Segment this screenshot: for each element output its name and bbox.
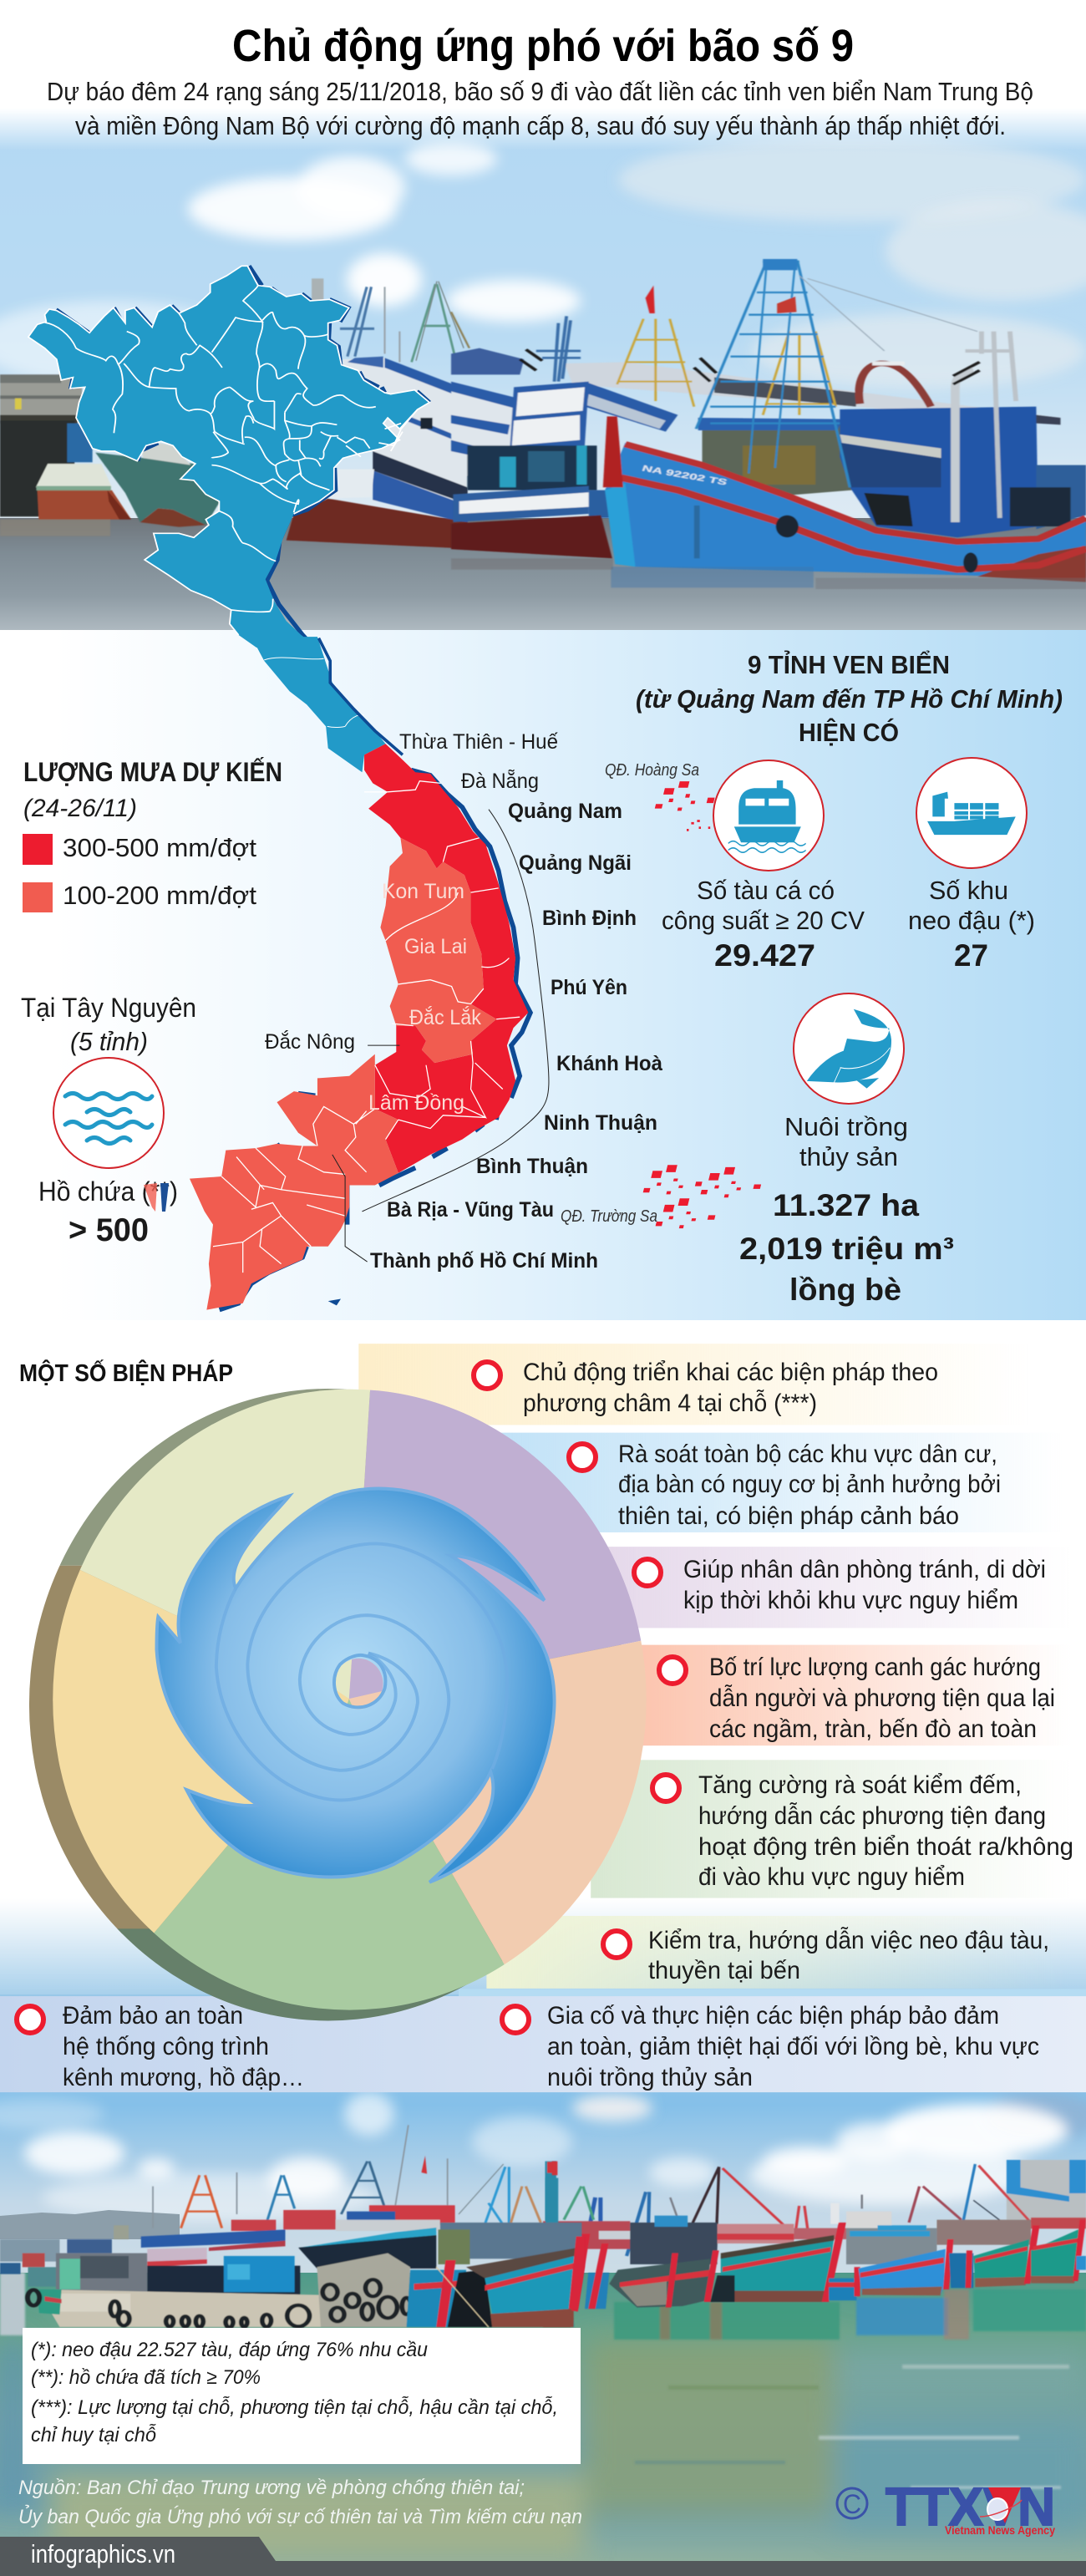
map labels: Phú Yên: [551, 976, 627, 999]
rainfall legend: 300-500 mm/đợt: [63, 833, 256, 862]
big hull: [605, 443, 1086, 579]
harbour right: big blue fishing boat: [451, 259, 1086, 589]
panel: 9 coastal provinces: [636, 650, 1063, 1307]
map of Vietnam: [28, 266, 662, 1310]
panel: measures: [0, 1344, 1086, 2092]
photo: fishing boats at harbour: [0, 100, 1086, 631]
teal hull: [466, 2248, 578, 2279]
red superstructure: [283, 2210, 336, 2229]
map labels: Bình Định: [542, 907, 637, 930]
boat A: [451, 382, 516, 476]
fleet: right half: [543, 2160, 1086, 2327]
measure 7: Đảm bảo an toàn: [63, 2002, 243, 2030]
map labels: Quảng Ngãi: [519, 851, 632, 875]
logo: TTXVN: Vietnam News Agency: [945, 2523, 1055, 2537]
icon: fishing boat: [713, 760, 824, 871]
disc: [28, 1389, 647, 2020]
reservoir stat: Tây Nguyên: > 500: [69, 1212, 149, 1248]
reservoir stat: Tây Nguyên: (5 tỉnh): [70, 1027, 148, 1056]
measure 1: phương châm 4 tại chỗ (***): [523, 1390, 817, 1417]
heading: MỘT SỐ BIỆN PHÁP: [19, 1359, 233, 1387]
intro text: [47, 77, 1033, 140]
barge: [56, 2253, 147, 2295]
stat: fishing boats: Số tàu cá có: [697, 876, 835, 905]
measure 6: thuyền tại bến: [648, 1957, 800, 1984]
measure 7: kênh mương, hồ đập…: [63, 2064, 304, 2091]
water colour variation: [0, 2340, 1086, 2557]
measure 2: địa bàn có nguy cơ bị ảnh hưởng bởi: [618, 1471, 1001, 1498]
islands: Hoàng Sa and Trường Sa: QĐ. Trường Sa: [561, 1207, 657, 1226]
blue tower: [696, 261, 850, 487]
measure 7: [17, 2002, 304, 2091]
source text: Nguồn: Ban Chỉ đạo Trung ương về phòng chống thiên tai;: [18, 2477, 525, 2499]
footnotes box: chỉ huy tại chỗ: [31, 2423, 156, 2446]
reservoir stat: Tây Nguyên: Hồ chứa (**): [38, 1176, 178, 1207]
rainfall legend: [23, 757, 282, 912]
yellow towers: [617, 319, 835, 415]
heading: HIỆN CÓ: [799, 717, 899, 747]
measure 4: dẫn người và phương tiện qua lại: [709, 1684, 1055, 1712]
chart: measure disc with hurricane: [28, 1389, 647, 2020]
map labels: Đà Nẵng: [461, 769, 539, 793]
superstructure: [840, 407, 1038, 537]
map labels: Gia Lai: [404, 935, 467, 958]
building: [1007, 2160, 1086, 2223]
map labels: Lâm Đồng: [368, 1091, 464, 1115]
photo: harbour with fishing fleet: [0, 1898, 1086, 2561]
map: central and southern provinces: [190, 637, 549, 1310]
map labels: Bà Rịa - Vũng Tàu: [387, 1198, 554, 1222]
measure 5: đi vào khu vực nguy hiểm: [698, 1863, 965, 1891]
stat: aquaculture: 2,019 triệu m³: [739, 1232, 954, 1266]
map labels: Bình Thuận: [476, 1155, 588, 1178]
fleet: left half: [0, 2125, 585, 2327]
salmon highlands 100-200 mm: [380, 838, 496, 1063]
hull 2: [721, 2238, 834, 2302]
rainfall legend: LƯỢNG MƯA DỰ KIẾN: [23, 757, 282, 787]
stat: anchorage areas: [908, 876, 1035, 973]
footnotes box: (*): neo đậu 22.527 tàu, đáp ứng 76% nhu cầu: [31, 2339, 428, 2361]
footer bar with site name: infographics.vn: [31, 2539, 175, 2568]
icon: fish: [794, 993, 904, 1104]
map labels: Đắc Nông: [265, 1029, 355, 1054]
icon: water waves: [53, 1058, 164, 1168]
pipes and masts: [955, 370, 973, 522]
rainfall legend: 100-200 mm/đợt: [63, 881, 256, 910]
measure 8: an toàn, giảm thiệt hại đối với lồng bè, khu vực: [547, 2033, 1039, 2060]
measure 8: [502, 2002, 1039, 2091]
map labels: Thừa Thiên - Huế: [399, 730, 558, 754]
measure 6: [603, 1927, 1049, 1984]
map: northern provinces: [28, 266, 429, 648]
measure 4: [659, 1654, 1055, 1743]
blue hull: [407, 2270, 466, 2327]
harbour right: big blue fishing boat: NA 92202 TS: [641, 464, 728, 487]
reflection: [611, 567, 814, 587]
footer bar with site name: [0, 2537, 1086, 2576]
footnotes box: (**): hồ chứa đã tích ≥ 70%: [31, 2366, 261, 2389]
islands: Hoàng Sa and Trường Sa: QĐ. Hoàng Sa: [605, 761, 699, 780]
hull 4: [973, 2239, 1029, 2287]
measure 5: hoạt động trên biển thoát ra/không: [698, 1833, 1073, 1861]
logo: TTXVN: C: [843, 2489, 861, 2519]
measure 6: Kiểm tra, hướng dẫn việc neo đậu tàu,: [648, 1927, 1049, 1954]
hull 0: [543, 2248, 578, 2327]
measure 1: Chủ động triển khai các biện pháp theo: [523, 1359, 938, 1386]
stat: fishing boats: 29.427: [714, 938, 815, 973]
hull 3: [859, 2249, 946, 2295]
harbour centre: blue-white boats left part: [287, 278, 468, 549]
map labels: Quảng Nam: [508, 800, 622, 823]
measure 8: nuôi trồng thủy sản: [547, 2064, 753, 2091]
map labels: Khánh Hoà: [556, 1052, 662, 1075]
stat: anchorage areas: Số khu: [929, 876, 1008, 905]
measure 4: Bố trí lực lượng canh gác hướng: [709, 1654, 1041, 1681]
footnotes box: [23, 2328, 581, 2464]
source text: [18, 2477, 582, 2528]
map labels: Kon Tum: [382, 880, 464, 903]
map labels: [265, 730, 662, 1273]
red provinces 300-500 mm: [364, 744, 528, 1173]
measure 8: Gia cố và thực hiện các biện pháp bảo đảm: [547, 2002, 999, 2030]
leader lines: [332, 810, 549, 1262]
section: map background: [0, 630, 1086, 1320]
boat B: [585, 382, 677, 432]
stat: fishing boats: công suất ≥ 20 CV: [662, 906, 865, 935]
measure 5: Tăng cường rà soát kiểm đếm,: [698, 1771, 1022, 1799]
towers: [153, 2125, 552, 2256]
measure 2: thiên tai, có biện pháp cảnh báo: [618, 1502, 959, 1530]
measure 2: [569, 1440, 1001, 1530]
salmon south provinces: [190, 1054, 398, 1310]
measure 5: [652, 1771, 1073, 1891]
masts: [551, 2162, 1031, 2256]
measure 5: hướng dẫn các phương tiện đang: [698, 1802, 1046, 1830]
reservoir stat: Tây Nguyên: [21, 993, 196, 1248]
reservoir stat: Tây Nguyên: Tại Tây Nguyên: [21, 993, 196, 1023]
hull 5: [1031, 2228, 1082, 2283]
measure 1: [474, 1359, 938, 1417]
hull 1 grey: [609, 2258, 710, 2308]
map labels: Thành phố Hồ Chí Minh: [370, 1249, 598, 1273]
stat: aquaculture: lồng bè: [789, 1273, 901, 1307]
distant building: [565, 362, 1060, 424]
measure 3: Giúp nhân dân phòng tránh, di dời: [683, 1556, 1046, 1583]
measure 3: [634, 1556, 1046, 1614]
measure 2: Rà soát toàn bộ các khu vực dân cư,: [618, 1440, 997, 1468]
icon: hurricane: [156, 1488, 555, 1882]
intro text: và miền Đông Nam Bộ với cường độ mạnh cấp 8, sau đó suy yếu thành áp thấp nhiệt đới.: [75, 111, 1006, 140]
measure 4: các ngầm, tràn, bến đò an toàn: [709, 1715, 1037, 1743]
canopy and middle of big boat: [703, 424, 852, 495]
stat: aquaculture: thủy sản: [799, 1142, 898, 1171]
icon: cargo ship: [916, 758, 1027, 868]
disc shadow: [28, 1389, 622, 2020]
coast strokes: [220, 770, 530, 1310]
disc sectors: [53, 1389, 647, 2010]
logo: TTXVN: TTXVN: [886, 2477, 1055, 2537]
map labels: Ninh Thuận: [544, 1111, 657, 1135]
measure 3: kịp thời khỏi khu vực nguy hiểm: [683, 1587, 1018, 1614]
footnotes box: (***): Lực lượng tại chỗ, phương tiện tại chỗ, hậu cần tại chỗ,: [31, 2396, 558, 2419]
heading: 9 TỈNH VEN BIỂN: [748, 650, 950, 679]
roofed boat: [300, 2228, 436, 2248]
stat: aquaculture: [739, 1112, 954, 1307]
stat: anchorage areas: 27: [954, 938, 988, 973]
stat: aquaculture: 11.327 ha: [773, 1188, 919, 1222]
heading: [636, 650, 1063, 747]
stat: anchorage areas: neo đậu (*): [908, 906, 1035, 935]
map labels: Đắc Lắk: [409, 1005, 481, 1029]
rainfall legend: (24-26/11): [23, 795, 137, 822]
stat: aquaculture: Nuôi trồng: [784, 1112, 908, 1141]
small boats left: [0, 2239, 59, 2262]
islands: Hoàng Sa and Trường Sa: [561, 761, 761, 1228]
source text: Ủy ban Quốc gia Ứng phó với sự cố thiên tai và Tìm kiếm cứu nạn: [18, 2504, 582, 2528]
measure bands: [0, 1344, 1086, 2092]
harbour left: quay, small boat, green hull: [0, 374, 219, 536]
backdrop: [543, 2221, 630, 2249]
stat: fishing boats: [662, 876, 865, 973]
measure 7: hệ thống công trình: [63, 2033, 269, 2060]
title: Chủ động ứng phó với bão số 9: [232, 21, 854, 71]
fade at top of photo: [0, 0, 1086, 150]
heading: (từ Quảng Nam đến TP Hồ Chí Minh): [636, 684, 1063, 714]
